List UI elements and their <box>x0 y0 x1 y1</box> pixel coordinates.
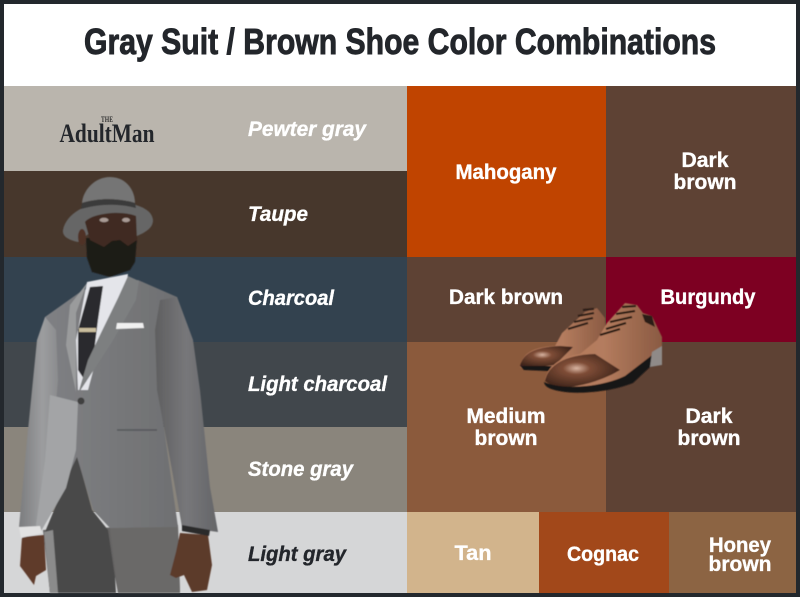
label: honey brown: brown <box>708 553 772 576</box>
face <box>85 213 137 247</box>
jacket button <box>78 398 84 404</box>
logo: The Adult Man: AdultMan <box>60 119 155 148</box>
back shoe toe <box>520 346 573 367</box>
back shoe sole <box>520 366 552 371</box>
right hand <box>170 533 212 592</box>
trouser right leg <box>110 526 180 593</box>
cuff <box>19 526 42 538</box>
label: dark brown top: Dark <box>682 149 729 172</box>
front shoe laces <box>600 306 636 335</box>
hat band <box>81 199 136 209</box>
shoe opening <box>642 314 655 327</box>
right lapel <box>78 276 139 394</box>
row: light gray <box>4 512 407 593</box>
swatch: dark brown lower <box>606 342 796 512</box>
label: honey brown: Honey <box>709 534 771 557</box>
swatch: honey brown <box>669 512 796 593</box>
shoe heel <box>650 346 662 367</box>
row: stone gray <box>4 427 407 512</box>
panel: shoe colors <box>407 86 796 593</box>
left hand <box>20 535 46 585</box>
label: light gray: Light gray <box>248 543 347 566</box>
front shoe toe <box>545 354 620 388</box>
title band <box>4 4 796 86</box>
trousers <box>43 525 180 593</box>
label: dark brown middle: Dark brown <box>449 286 563 309</box>
swatch: mahogany <box>407 86 606 257</box>
hip pocket <box>117 429 157 431</box>
label: dark brown lower <box>678 405 740 450</box>
ear <box>78 229 86 245</box>
front shoe <box>545 303 662 390</box>
right sleeve <box>155 297 218 532</box>
front shoe sole <box>544 349 662 393</box>
shirt <box>76 274 128 390</box>
necktie <box>78 286 103 382</box>
label: honey brown <box>708 534 772 576</box>
label: stone gray: Stone gray <box>248 458 354 481</box>
label: charcoal: Charcoal <box>248 287 335 310</box>
illustration: man in gray suit <box>19 177 218 593</box>
label: cognac: Cognac <box>567 543 639 566</box>
label: dark brown top <box>674 149 736 194</box>
label: taupe: Taupe <box>248 203 308 226</box>
hat crown <box>82 177 135 203</box>
left sleeve <box>19 317 58 527</box>
swatch: cognac <box>539 512 669 593</box>
jacket left front light panel <box>36 395 78 533</box>
illustration: brown oxford shoes <box>520 303 662 393</box>
row: pewter gray <box>4 86 407 171</box>
label: dark brown lower: Dark <box>686 405 733 428</box>
label: pewter gray: Pewter gray <box>248 118 367 141</box>
label: light charcoal: Light charcoal <box>248 373 388 396</box>
label: dark brown top: brown <box>674 171 736 194</box>
back shoe laces <box>568 309 594 329</box>
label: burgundy: Burgundy <box>660 286 756 309</box>
label: tan: Tan <box>454 542 492 565</box>
tie bar <box>79 328 96 332</box>
left lapel <box>66 283 87 392</box>
swatch: burgundy <box>606 257 796 342</box>
hat brim <box>63 202 153 242</box>
label: dark brown lower: brown <box>678 427 740 450</box>
label: medium brown: brown <box>474 427 538 450</box>
pocket square <box>116 323 144 329</box>
row: light charcoal <box>4 342 407 427</box>
back shoe <box>520 308 606 370</box>
label: mahogany: Mahogany <box>456 161 557 184</box>
jacket body <box>37 280 193 533</box>
label: medium brown: Medium <box>466 405 546 428</box>
swatch: tan <box>407 512 539 593</box>
trouser light leg <box>44 530 58 593</box>
trouser shadow <box>45 455 116 593</box>
swatch: dark brown top <box>606 86 796 257</box>
row: taupe <box>4 171 407 257</box>
swatch: medium brown <box>407 342 606 512</box>
eyes <box>100 218 108 222</box>
swatch: dark brown middle <box>407 257 606 342</box>
logo: The Adult Man: THE <box>101 115 113 124</box>
label: medium brown <box>466 405 546 450</box>
bracelet <box>182 525 210 536</box>
row: charcoal <box>4 257 407 342</box>
panel: suit colors <box>4 86 407 593</box>
beard <box>86 238 137 277</box>
